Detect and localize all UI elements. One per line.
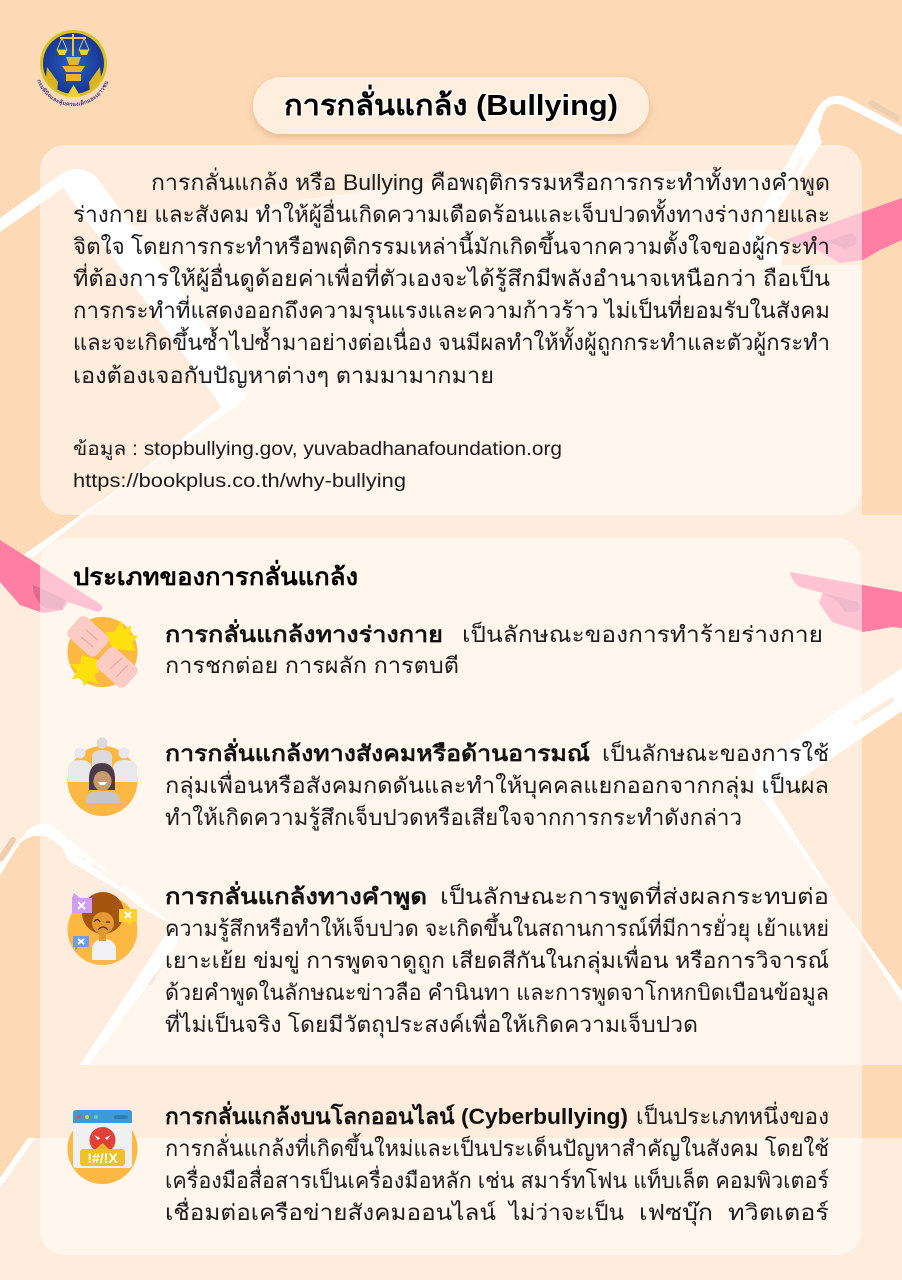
icon: cyberbullying <box>68 1110 138 1184</box>
pointing hand: middle right <box>790 572 902 632</box>
title pill: การกลั่นแกล้ง (Bullying) <box>284 84 618 122</box>
text block: sources: ข้อมูล : stopbullying.gov, yuvabadhanafoundation.org <box>73 439 562 460</box>
text block: definition: เองต้องเจอกับปัญหาต่างๆ ตามมามากมาย <box>73 363 494 388</box>
text block: definition: การกลั่นแกล้ง หรือ Bullying คือพฤติกรรมหรือการกระทำทั้งทางคำพูด <box>151 167 830 196</box>
text block: cyberbullying: ไม่ว่าจะเป็น <box>507 1198 624 1225</box>
text block: social bullying <box>165 737 829 831</box>
phone frame: top right <box>749 96 902 268</box>
text block: verbal bullying: เป็นลักษณะการพูดที่ส่งผลกระทบต่อ <box>440 881 829 910</box>
text block: social bullying: ทำให้เกิดความรู้สึกเจ็บปวดหรือเสียใจจากการกระทำดังกล่าว <box>165 803 742 831</box>
title pill <box>253 77 649 134</box>
text block: verbal bullying: ที่ไม่เป็นจริง โดยมีวัตถุประสงค์เพื่อให้เกิดความเจ็บปวด <box>165 1009 698 1038</box>
heading: types: ประเภทของการกลั่นแกล้ง <box>73 559 358 591</box>
text block: verbal bullying <box>165 880 829 1038</box>
text block: verbal bullying: ความรู้สึกหรือทำให้เจ็บปวด จะเกิดขึ้นในสถานการณ์ที่มีการยั่วยุ เย้าแหย่ <box>165 913 829 942</box>
text block: social bullying: เป็นลักษณะของการใช้ <box>602 739 829 766</box>
icon: verbal bullying <box>68 892 138 965</box>
pointing hand: top right <box>785 198 902 263</box>
text block: physical bullying <box>165 618 823 678</box>
text block: cyberbullying: เครื่องมือสื่อสารเป็นเครื่องมือหลัก เช่น สมาร์ทโฟน แท็บเล็ต คอมพิวเตอร์ <box>165 1165 829 1193</box>
text block: cyberbullying: เป็นประเภทหนึ่งของ <box>636 1101 829 1129</box>
text block: social bullying: กลุ่มเพื่อนหรือสังคมกดดันและทำให้บุคคลแยกออกจากกลุ่ม เป็นผล <box>165 770 829 799</box>
text block: sources <box>73 439 562 492</box>
text block: physical bullying: การกลั่นแกล้งทางร่างกาย <box>165 618 443 647</box>
text block: definition: ที่ต้องการให้ผู้อื่นดูด้อยค่าเพื่อที่ตัวเองจะได้รู้สึกมีพลังอำนาจเหนือกว่า ถือเป็น <box>73 263 830 292</box>
icon: cyberbullying: !#/!X <box>87 1150 118 1166</box>
text block: cyberbullying: เชื่อมต่อเครือข่ายสังคมออนไลน์ <box>165 1197 496 1225</box>
text block: definition: และจะเกิดขึ้นซ้ำไปซ้ำมาอย่างต่อเนื่อง จนมีผลทำให้ทั้งผู้ถูกกระทำและตัวผู้กระทำ <box>73 327 830 356</box>
text block: cyberbullying: การกลั่นแกล้งที่เกิดขึ้นใหม่และเป็นประเด็นปัญหาสำคัญในสังคม โดยใช้ <box>165 1133 829 1161</box>
text block: social bullying: การกลั่นแกล้งทางสังคมหรือด้านอารมณ์ <box>165 737 590 766</box>
text block: definition: ร่างกาย และสังคม ทำให้ผู้อื่นเกิดความเดือดร้อนและเจ็บปวดทั้งทางร่างกายและ <box>73 199 830 228</box>
panel: definition <box>40 145 862 515</box>
pointing hand: left <box>0 540 103 613</box>
phone frame: middle left <box>0 824 178 1188</box>
text block: cyberbullying: เฟซบุ๊ก <box>639 1200 713 1226</box>
text block: verbal bullying: เยาะเย้ย ข่มขู่ การพูดจาดูถูก เสียดสีกันในกลุ่มเพื่อน หรือการวิจารณ์ <box>165 945 829 974</box>
logo: กรมพินิจและคุ้มครองเด็กและเยาวชน <box>37 80 108 106</box>
text block: verbal bullying: ด้วยคำพูดในลักษณะข่าวลือ คำนินทา และการพูดจาโกหกบิดเบือนข้อมูล <box>165 980 829 1006</box>
icon: social exclusion <box>68 738 138 816</box>
text block: definition: จิตใจ โดยการกระทำหรือพฤติกรรมเหล่านี้มักเกิดขึ้นจากความตั้งใจของผู้กระทำ <box>73 231 830 260</box>
text block: physical bullying: การชกต่อย การผลัก การตบตี <box>165 653 459 678</box>
logo <box>37 30 108 106</box>
text block: cyberbullying: ทวิตเตอร์ <box>728 1200 829 1225</box>
text block: verbal bullying: การกลั่นแกล้งทางคำพูด <box>165 880 427 911</box>
text block: cyberbullying <box>165 1100 829 1226</box>
phone frame: top left <box>0 169 248 558</box>
panel: types <box>40 538 862 1255</box>
text block: cyberbullying: การกลั่นแกล้งบนโลกออนไลน์ (Cyberbullying) <box>165 1100 628 1129</box>
text block: sources: https://bookplus.co.th/why-bullying <box>73 471 406 492</box>
text block: definition: การกระทำที่แสดงออกถึงความรุนแรงและความก้าวร้าว ไม่เป็นที่ยอมรับในสังคม <box>73 295 830 324</box>
text block: physical bullying: เป็นลักษณะของการทำร้ายร่างกาย <box>462 620 823 647</box>
icon: fists <box>65 614 140 690</box>
phone frame: middle right <box>753 668 902 1003</box>
text block: definition <box>73 167 830 388</box>
